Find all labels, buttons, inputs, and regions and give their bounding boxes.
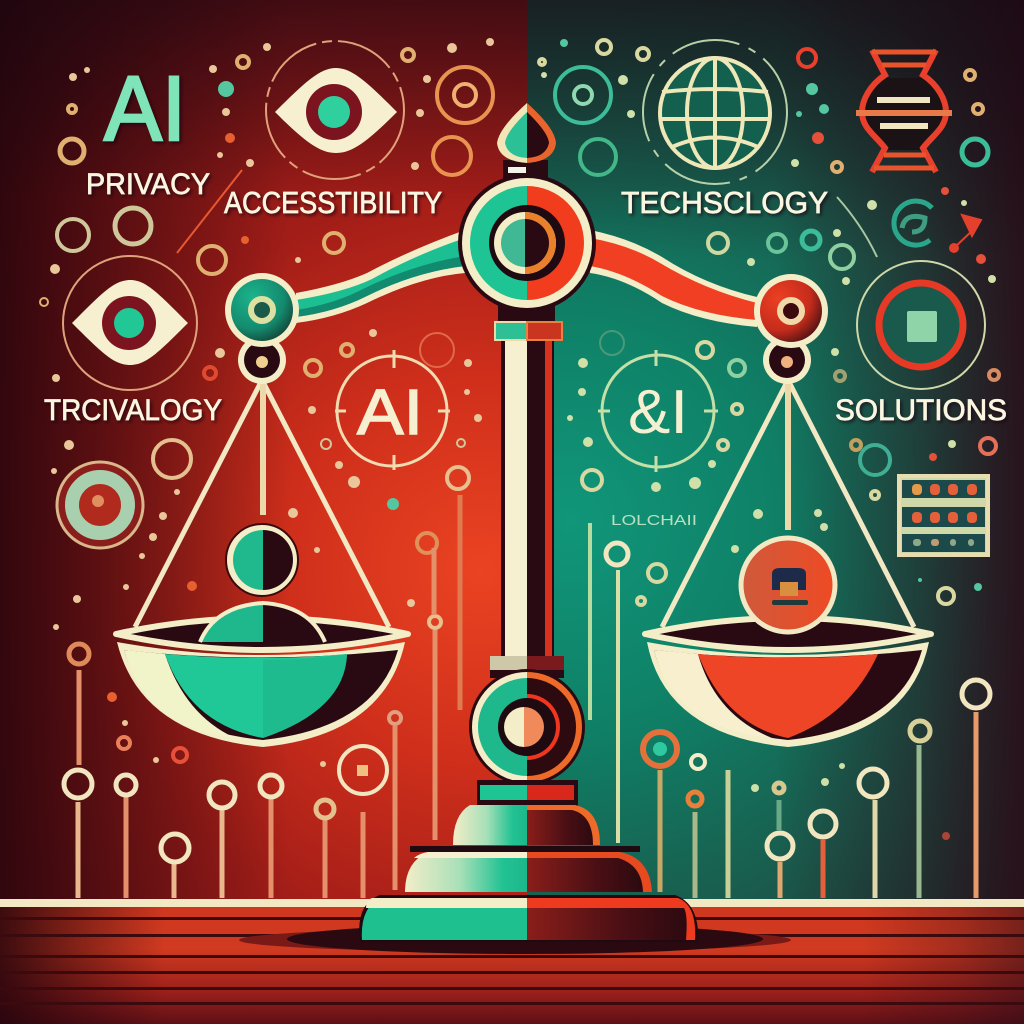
bottom lollipops right bbox=[590, 523, 990, 898]
label: solutions: SOLUTIONS bbox=[835, 394, 1007, 427]
icon: eye left bbox=[63, 256, 197, 390]
right arm bbox=[590, 230, 757, 327]
left arm bbox=[296, 230, 465, 323]
bottom tier bbox=[359, 895, 698, 942]
ring decorations bbox=[40, 40, 999, 769]
icon: globe bbox=[643, 40, 787, 184]
label: small blockchain text: LOLCHAII bbox=[611, 512, 697, 529]
right bowl bbox=[645, 618, 931, 747]
heading: AI top left: AI bbox=[104, 58, 186, 160]
left bowl bbox=[116, 618, 408, 747]
label: privacy: PRIVACY bbox=[86, 168, 210, 201]
second tier bbox=[453, 805, 600, 845]
left joint bbox=[225, 273, 299, 384]
top finial bbox=[497, 103, 556, 185]
icon: red molecule bbox=[950, 215, 981, 252]
tiered base bbox=[359, 780, 698, 942]
top hub bbox=[458, 174, 596, 312]
icon: AI circle bbox=[335, 350, 450, 470]
background: red left half bbox=[0, 0, 527, 900]
ground shadow bbox=[239, 924, 791, 954]
left person weight bbox=[200, 524, 325, 642]
label: accessibility: ACCESSTIBILITY bbox=[224, 185, 442, 220]
label: technology: TECHSCLOGY bbox=[621, 185, 828, 220]
right pan and chains bbox=[645, 380, 931, 747]
scale beam bbox=[225, 230, 828, 384]
floor stripes bbox=[0, 899, 1024, 1024]
right round weight bbox=[741, 538, 835, 632]
icon: &I circle bbox=[598, 350, 718, 472]
third tier bbox=[405, 846, 652, 892]
icon: DNA helix bbox=[856, 50, 952, 172]
background: green right half bbox=[527, 0, 1024, 900]
bottom lollipops left bbox=[64, 495, 460, 898]
icon: square target right bbox=[857, 261, 985, 389]
left pan and chains bbox=[116, 380, 408, 747]
icon: spiral bbox=[894, 201, 932, 245]
scale column bbox=[495, 305, 562, 670]
icon: data grid bbox=[899, 476, 988, 555]
right joint bbox=[754, 274, 828, 384]
top tier bbox=[477, 780, 578, 806]
decorative dots bbox=[50, 38, 996, 840]
lower hub bbox=[469, 656, 585, 785]
icon: target badge left bbox=[57, 462, 143, 548]
icon: &I circle: &I bbox=[628, 378, 688, 447]
icon: AI circle: AI bbox=[357, 376, 423, 448]
label: trcivalogy: TRCIVALOGY bbox=[44, 394, 222, 427]
icon: eye top bbox=[266, 41, 404, 179]
